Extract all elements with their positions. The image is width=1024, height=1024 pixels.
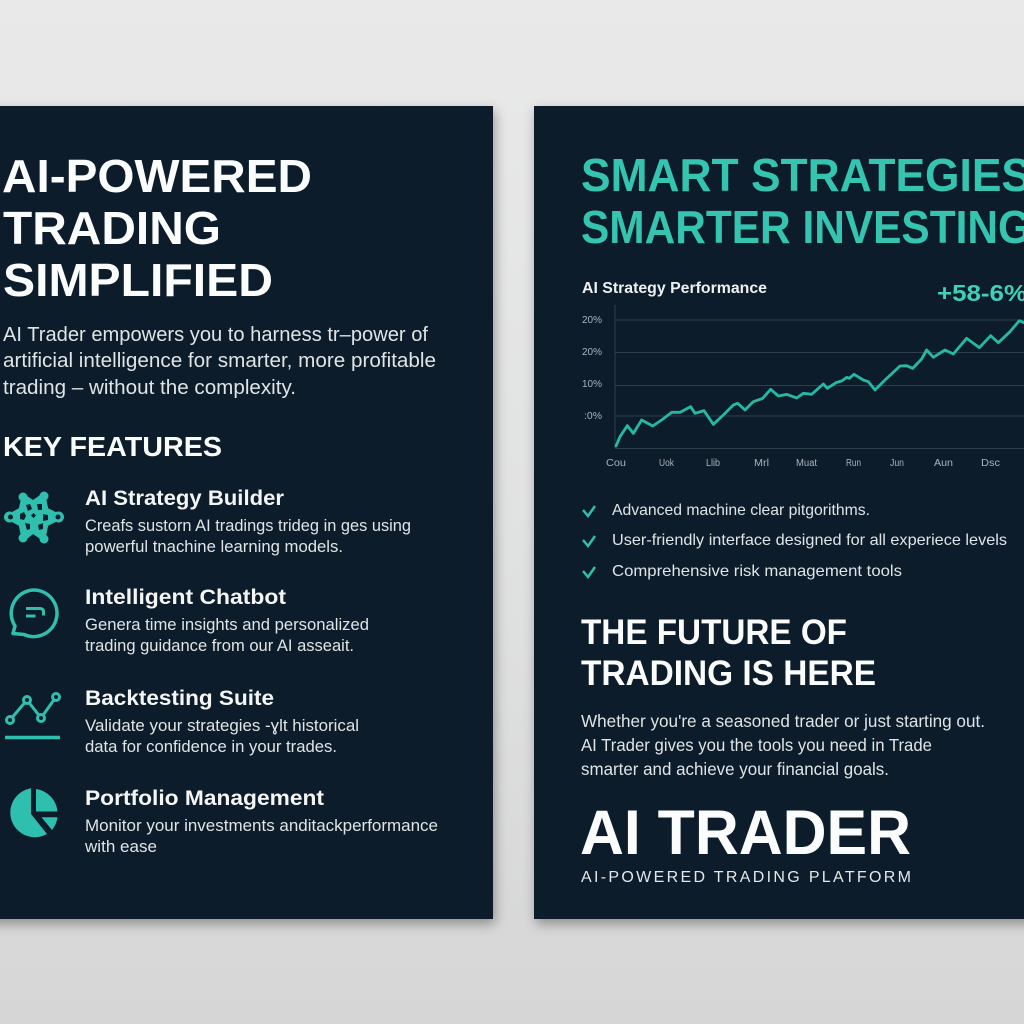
x axis labels: Run (846, 458, 861, 469)
panel: left flyer (0, 106, 493, 919)
title: SIMPLIFIED (3, 254, 273, 306)
checklist: Comprehensive risk management tools (612, 563, 902, 580)
x axis labels: Dsc (981, 458, 1000, 469)
icon: checks (583, 506, 595, 577)
callout: performance value: +58-6% (937, 280, 1024, 306)
x axis labels: Aun (934, 458, 953, 469)
brand logo: AI-POWERED TRADING PLATFORM (581, 869, 911, 886)
body text: AI Trader gives you the tools you need in Trade (581, 735, 932, 755)
heading: future of trading: TRADING IS HERE (581, 654, 876, 693)
title (2, 150, 312, 306)
body text (581, 711, 985, 779)
intro text: AI Trader empowers you to harness tr–power of (3, 324, 428, 346)
x axis labels: Muat (796, 458, 817, 469)
performance line (616, 321, 1024, 446)
y axis labels: :0% (584, 411, 602, 422)
feature: Backtesting Suite: Validate your strategies -ɣlt historical (85, 716, 359, 735)
heading: future of trading: THE FUTURE OF (581, 613, 847, 652)
x axis labels (606, 458, 1000, 469)
intro text (3, 324, 436, 399)
feature: Intelligent Chatbot (11, 585, 369, 655)
feature: AI Strategy Builder: powerful tnachine learning models. (85, 537, 343, 556)
chart: AI strategy performance (582, 280, 1024, 469)
checklist (583, 502, 1007, 580)
checklist: Advanced machine clear pitgorithms. (612, 502, 870, 519)
feature: AI Strategy Builder (4, 486, 411, 556)
feature: AI Strategy Builder: Creafs sustorn AI tradings trideg in ges using (85, 516, 411, 535)
x axis labels: Cou (606, 458, 626, 469)
y axis labels (582, 315, 602, 422)
y axis labels: 20% (582, 315, 602, 326)
feature: AI Strategy Builder: AI Strategy Builder (85, 486, 285, 510)
title: TRADING (3, 202, 221, 254)
y axis labels: 20% (582, 347, 602, 358)
body text: smarter and achieve your financial goals. (581, 759, 889, 779)
feature: Portfolio Management: with ease (84, 837, 157, 856)
feature: Intelligent Chatbot: Intelligent Chatbot (85, 585, 286, 609)
x axis labels: Llib (706, 458, 720, 469)
feature: Backtesting Suite (5, 686, 359, 756)
x axis labels: Mrl (754, 458, 769, 469)
checklist: User-friendly interface designed for all experiece levels (612, 532, 1007, 549)
panel: right flyer (534, 106, 1024, 919)
feature: Portfolio Management: Portfolio Management (85, 786, 324, 810)
title: AI-POWERED (2, 150, 312, 202)
feature: Intelligent Chatbot: trading guidance from our AI asseait. (85, 636, 354, 655)
icon: line chart (5, 694, 60, 738)
feature: Backtesting Suite: Backtesting Suite (85, 686, 274, 710)
intro text: artificial intelligence for smarter, more profitable (3, 350, 436, 372)
icon: neural network star (4, 492, 64, 544)
feature: Backtesting Suite: data for confidence in your trades. (85, 737, 337, 756)
intro text: trading – without the complexity. (3, 377, 296, 399)
brand logo: AI TRADER (580, 798, 911, 868)
x axis labels: Uok (659, 458, 675, 469)
feature: Portfolio Management (10, 786, 438, 856)
feature: Portfolio Management: Monitor your investments anditackperformance (85, 816, 438, 835)
chart title: AI Strategy Performance (582, 280, 767, 297)
feature: Intelligent Chatbot: Genera time insights and personalized (85, 615, 369, 634)
heading: future of trading (581, 613, 876, 693)
title (581, 149, 1024, 253)
y axis labels: 10% (582, 379, 602, 390)
x axis labels: Jun (890, 458, 904, 469)
body text: Whether you're a seasoned trader or just starting out. (581, 711, 985, 731)
icon: pie chart (10, 788, 57, 837)
heading: key features: KEY FEATURES (3, 431, 222, 462)
icon: chat bubble (11, 590, 57, 637)
